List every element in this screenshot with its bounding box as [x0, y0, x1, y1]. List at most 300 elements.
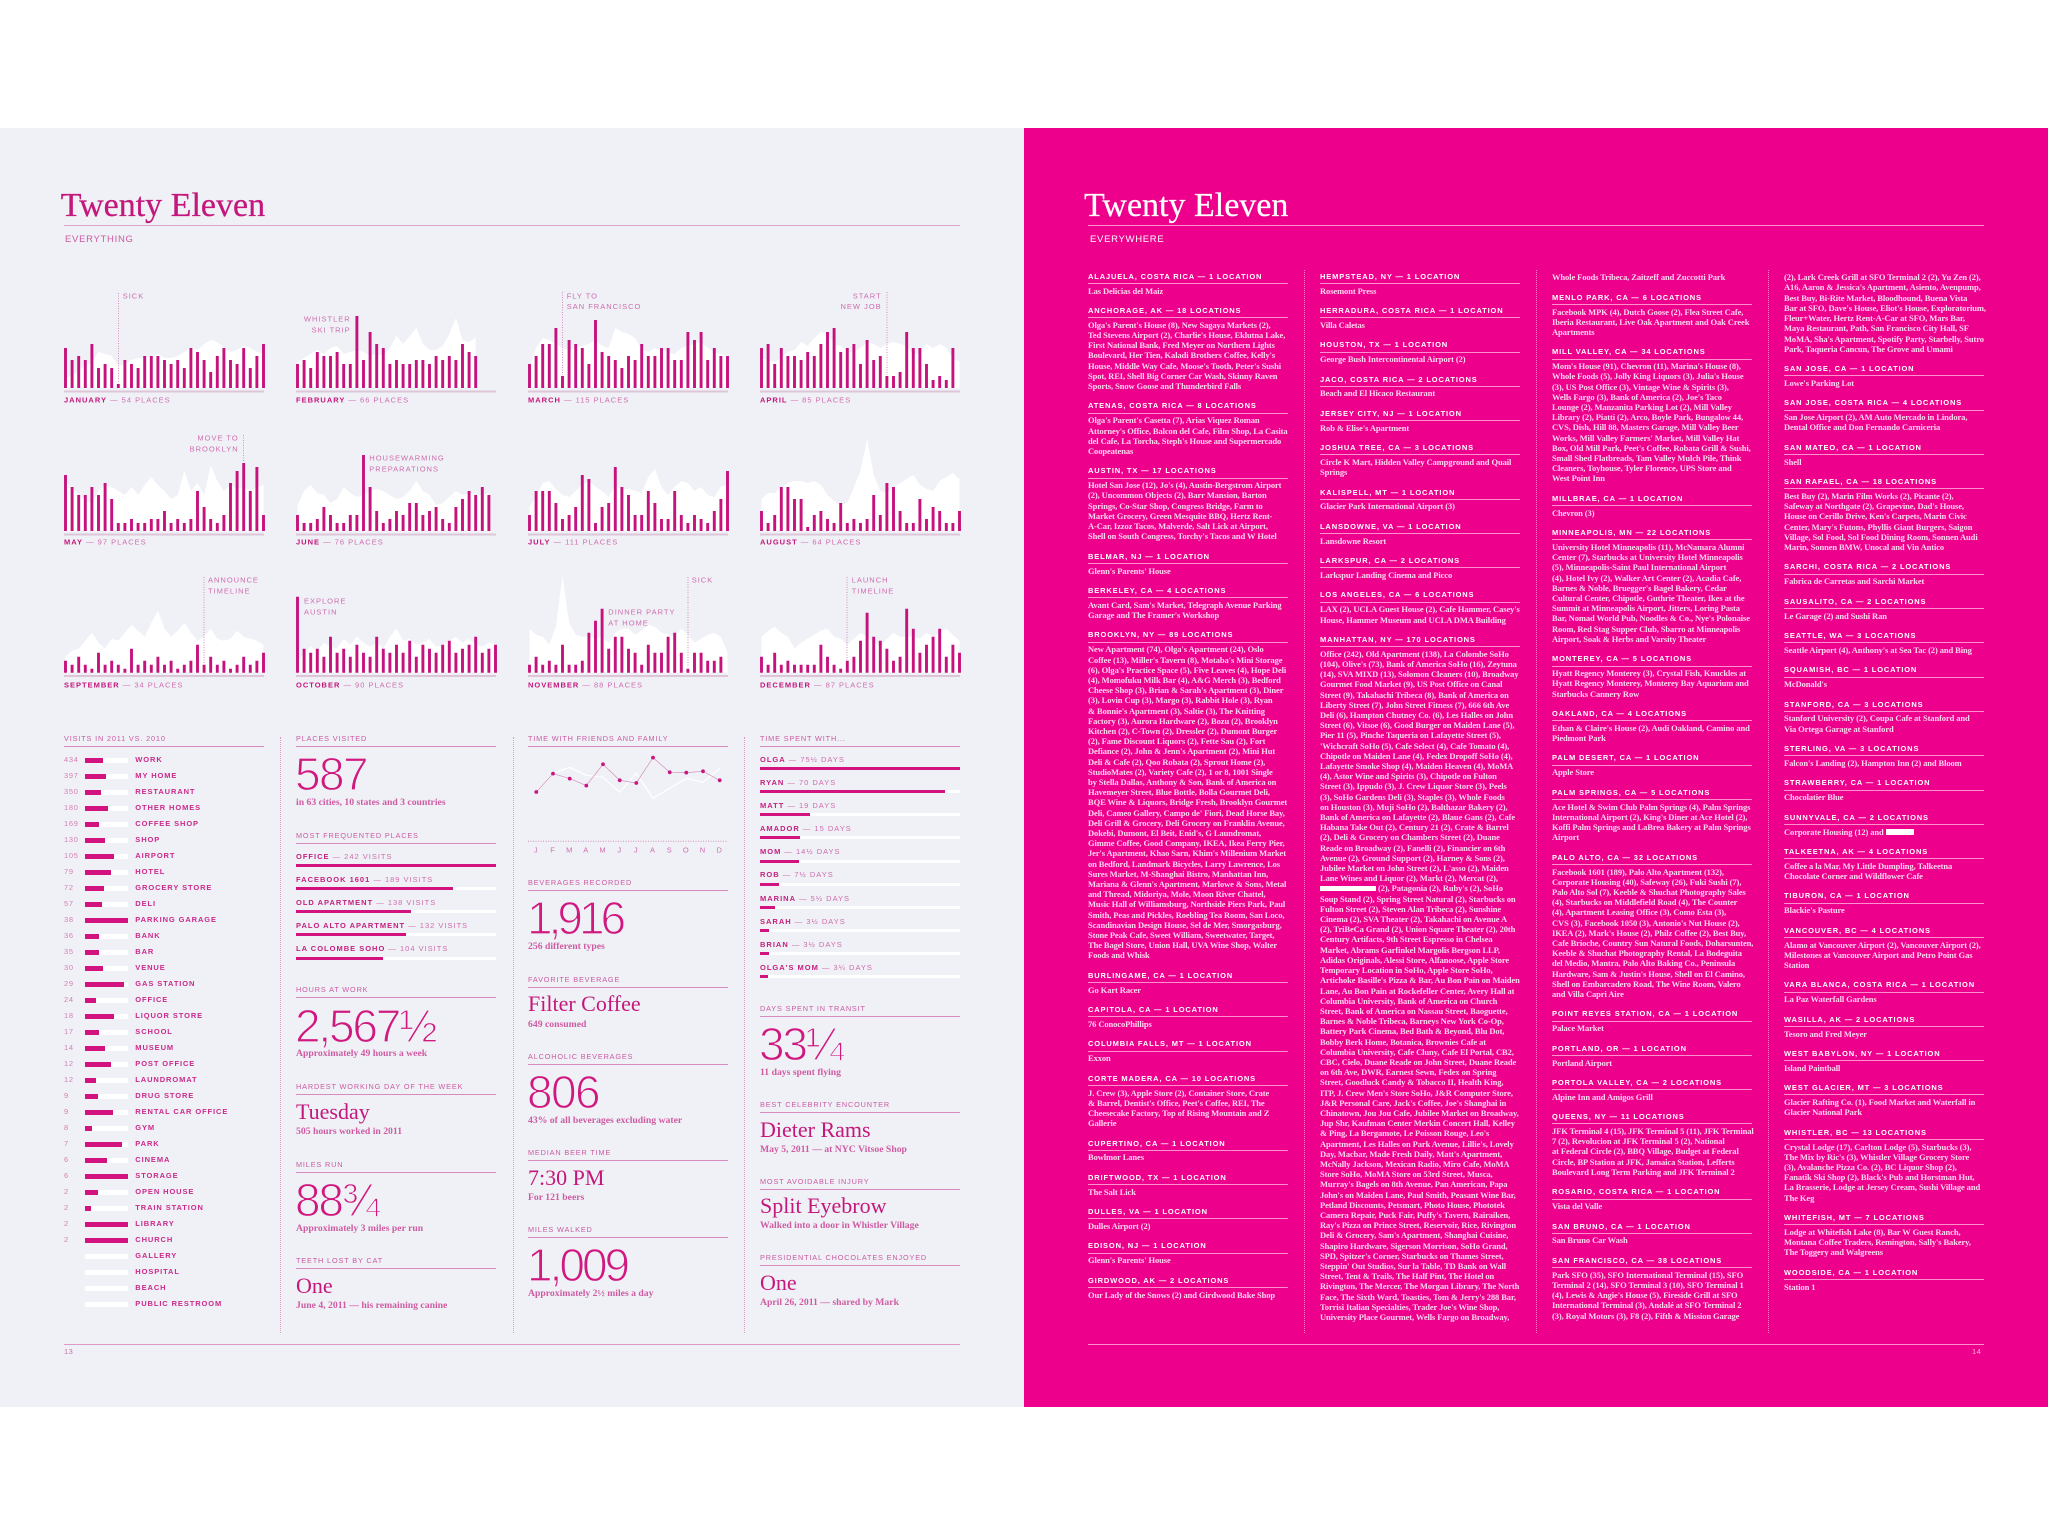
- location: Vancouver: [1784, 925, 1984, 970]
- row: liquor store: 18: [64, 1011, 74, 1020]
- chart: September: [64, 576, 264, 689]
- location: Berkeley: BERKELEY, CA — 4 LOCATIONS: [1088, 586, 1226, 595]
- location: Herradura: [1320, 305, 1520, 330]
- location: San Rafael: Village, Sol Food, Sol Food Dining Room, Sonnen Audi: [1784, 532, 1978, 542]
- location: Joshua Tree: Springs: [1320, 467, 1347, 477]
- chart: August: [760, 439, 960, 547]
- location: Menlo Park: MENLO PARK, CA — 6 LOCATIONS: [1552, 293, 1702, 302]
- location: San Rafael: SAN RAFAEL, CA — 18 LOCATIONS: [1784, 477, 1937, 486]
- row: restaurant: 350: [64, 787, 79, 796]
- location: Manhattan: Adidas Originals, Alessi Store, Alfanoose, Apple Store: [1320, 955, 1509, 965]
- row: airport: [64, 851, 175, 860]
- row: deli: 57: [64, 899, 74, 908]
- location: Manhattan: Soup Stand (2), Spring Street Natural (2), Starbucks on: [1320, 894, 1516, 904]
- location: Sausalito: [1784, 596, 1984, 621]
- row: bank: 36: [64, 931, 74, 940]
- line chart: time with friends and family: M: [599, 845, 607, 854]
- location: Manhattan: Pier 11 (5), Pinche Taqueria on Lafayette Street (5),: [1320, 730, 1501, 740]
- row: open house: 2: [64, 1187, 69, 1196]
- location: Millbrae: [1552, 493, 1752, 518]
- chart: January: JANUARY — 54 PLACES: [64, 396, 171, 405]
- location: Brooklyn: Foods and Whisk: [1088, 950, 1150, 960]
- location: Austin: Market Grocery, Green Mesquite BBQ, Hertz Rent-: [1088, 511, 1272, 521]
- location: Vancouver: Alamo at Vancouver Airport (2), Vancouver Airport (2),: [1784, 940, 1981, 950]
- location: Brooklyn: Factory (3), Aurora Hardware (2), Bozu (2), Brooklyn: [1088, 716, 1278, 726]
- item: office: OFFICE — 242 VISITS: [296, 852, 393, 861]
- list: time spent with: TIME SPENT WITH...: [760, 734, 846, 743]
- location: Cupertino: Bowlmor Lanes: [1088, 1152, 1144, 1162]
- location: Columbia Falls: COLUMBIA FALLS, MT — 1 LOCATION: [1088, 1039, 1252, 1048]
- row: rental car office: [64, 1107, 228, 1116]
- location: Queens: 7 (2), Revolucion at JFK Terminal 5 (2), National: [1552, 1136, 1725, 1146]
- location: Manhattan: Jubilee Market on John Street (2), L'asso (2), Maiden: [1320, 863, 1509, 873]
- stat: days spent in transit: DAYS SPENT IN TRANSIT: [760, 1004, 866, 1013]
- row: my home: 397: [64, 771, 79, 780]
- line chart: time with friends and family: J: [634, 845, 639, 854]
- location: Hempstead: [1320, 271, 1520, 296]
- location column 3: [1552, 271, 1752, 1330]
- location: Corte Madera: Gallerie: [1088, 1118, 1116, 1128]
- location: Manhattan: Torrisi Italian Specialties, Trader Joe's Wine Shop,: [1320, 1302, 1499, 1312]
- location: Manhattan: [1320, 634, 1520, 1322]
- location: Kalispell: [1320, 487, 1520, 512]
- location: Vara Blanca: [1784, 979, 1984, 1004]
- stat: presidential chocolates enjoyed: [760, 1253, 960, 1308]
- location: Atenas: del Cafe, La Torcha, Steph's House and Supermercado: [1088, 436, 1281, 446]
- location: Capitola: CAPITOLA, CA — 1 LOCATION: [1088, 1005, 1219, 1014]
- location: Brooklyn: StudioMates (2), Variety Cafe (2), 1 or 8, 1001 Single: [1088, 767, 1273, 777]
- item: rob: ROB — 7½ DAYS: [760, 870, 834, 879]
- location: West Glacier: [1784, 1082, 1984, 1117]
- location: Anchorage: Ted Stevens Airport (2), Charlie's House, Eklutna Lake,: [1088, 330, 1285, 340]
- location: Monterey: Hyatt Regency Monterey, Monterey Bay Aquarium and: [1552, 678, 1749, 688]
- row: other homes: [64, 803, 201, 812]
- stat: miles walked: [528, 1225, 728, 1301]
- item: facebook 1601: FACEBOOK 1601 — 189 VISITS: [296, 875, 433, 884]
- location: Minneapolis: Airport, Soak & Herbs and Varsity Theater: [1552, 634, 1706, 644]
- chart: May: BROOKLYN: [190, 444, 239, 453]
- location: San Francisco continued: Best Buy, Bi-Rite Market, Bloodhound, Buena Vista: [1784, 293, 1967, 303]
- location: Brooklyn: Deli, Cameo Gallery, Campo de' Fiori, Dead Horse Bay,: [1088, 808, 1285, 818]
- chart: May: MAY — 97 PLACES: [64, 538, 147, 547]
- location: Palm Desert: [1552, 752, 1752, 778]
- location: Jaco: JACO, COSTA RICA — 2 LOCATIONS: [1320, 375, 1478, 384]
- chart: March: FLY TO: [567, 291, 598, 300]
- stat: places visited: [295, 734, 496, 808]
- location: Minneapolis: Barnes & Noble, Bruegger's Bagel Bakery, Cedar: [1552, 583, 1727, 593]
- location: Brooklyn: Jer's Apartment, Khao Sarn, Khim's Millenium Market: [1088, 848, 1286, 858]
- location: Monterey: Hyatt Regency Monterey (3), Crystal Fish, Knuckles at: [1552, 668, 1746, 678]
- location: Dulles: DULLES, VA — 1 LOCATION: [1088, 1207, 1208, 1216]
- location: San Bruno: SAN BRUNO, CA — 1 LOCATION: [1552, 1222, 1691, 1231]
- item: ryan: RYAN — 70 DAYS: [760, 778, 836, 787]
- location: Whitefish: The Toggery and Walgreens: [1784, 1247, 1883, 1257]
- location: Queens: Circle, BP Station at JFK, Jamaica Station, Lefferts: [1552, 1157, 1735, 1167]
- location: Atenas: [1088, 400, 1288, 456]
- location: Larkspur: Larkspur Landing Cinema and Picco: [1320, 570, 1452, 580]
- location: Joshua Tree: [1320, 442, 1520, 477]
- location: Austin: Shell on South Congress, Torchy's Tacos and W Hotel: [1088, 531, 1277, 541]
- row: museum: [64, 1043, 174, 1052]
- row: shop: 130: [64, 835, 79, 844]
- row: parking garage: [64, 915, 217, 924]
- row: beach: BEACH: [135, 1283, 166, 1292]
- location: Manhattan: Habana Take Out (2), Century 21 (2), Crate & Barrel: [1320, 822, 1509, 832]
- stat: places visited: in 63 cities, 10 states and 3 countries: [296, 797, 446, 808]
- location: Palm Springs: Koffi Palm Springs and LaBrea Bakery at Palm Springs: [1552, 822, 1751, 832]
- location: Sterling: STERLING, VA — 3 LOCATIONS: [1784, 744, 1919, 753]
- stat: presidential chocolates enjoyed: One: [760, 1270, 797, 1295]
- page number 13: 13: [64, 1347, 73, 1356]
- chart: June: JUNE — 76 PLACES: [296, 538, 384, 547]
- row: deli: DELI: [135, 899, 156, 908]
- location: Queens: Boulevard Long Term Parking and JFK Terminal 2: [1552, 1167, 1735, 1177]
- location: Manhattan continued: Whole Foods Tribeca, Zaitzeff and Zuccotti Park: [1552, 272, 1725, 282]
- location: San Rafael: [1784, 476, 1984, 552]
- location: San Francisco continued: Fleur+Water, Hertz Rent-A-Car at SFO, Mars Bar,: [1784, 313, 1965, 323]
- row: liquor store: [64, 1011, 203, 1020]
- location: Whistler: Fanatik Ski Shop (2), Black's Pub and Horstman Hut,: [1784, 1172, 1974, 1182]
- row: my home: MY HOME: [135, 771, 177, 780]
- row: deli: [64, 899, 156, 908]
- row: school: 17: [64, 1027, 74, 1036]
- location: Whitefish: Lodge at Whitefish Lake (8), Bar W Guest Ranch,: [1784, 1227, 1960, 1237]
- location: Squamish: McDonald's: [1784, 679, 1827, 689]
- location: Oakland: Ethan & Claire's House (2), Audi Oakland, Camino and: [1552, 723, 1750, 733]
- item: olga: [760, 755, 960, 778]
- location: Joshua Tree: Circle K Mart, Hidden Valley Campground and Quail: [1320, 457, 1511, 467]
- line chart: time with friends and family: S: [667, 845, 673, 854]
- location: Hempstead: Rosemont Press: [1320, 286, 1376, 296]
- row: restaurant: RESTAURANT: [135, 787, 195, 796]
- location: Manhattan: Face, The Sixth Ward, Toasties, Tom & Jerry's 288 Bar,: [1320, 1292, 1516, 1302]
- location: Whistler: Crystal Lodge (17), Carlton Lodge (5), Starbucks (3),: [1784, 1142, 1971, 1152]
- row: drug store: DRUG STORE: [135, 1091, 194, 1100]
- location: San Bruno: San Bruno Car Wash: [1552, 1235, 1628, 1245]
- location: Vancouver: Milestones at Vancouver Airport and Petro Point Gas: [1784, 950, 1972, 960]
- location: Lansdowne: Lansdowne Resort: [1320, 536, 1386, 546]
- location: Manhattan: CBC, Cielo, Duane Reade on John Street, Duane Reade: [1320, 1057, 1516, 1067]
- row: church: CHURCH: [135, 1235, 173, 1244]
- row: storage: [64, 1171, 179, 1180]
- location: San Rafael: Marin, Sonnen BMW, Unocal and Vin Antico: [1784, 542, 1944, 552]
- location: Manhattan: (4), Astor Wine and Spirits (3), Chipotle on Fulton: [1320, 771, 1497, 781]
- stat: days spent in transit: [760, 1004, 960, 1080]
- location: Girdwood: GIRDWOOD, AK — 2 LOCATIONS: [1088, 1276, 1229, 1285]
- location: Brooklyn: Sures Market, M-Shanghai Bistro, Manhattan Inn,: [1088, 869, 1268, 879]
- location: Manhattan: Reade on Broadway (2), Fanelli (2), Financier on 6th: [1320, 843, 1505, 853]
- location: Manhattan: Avenue (2), Ground Support (2), Harney & Sons (2),: [1320, 853, 1505, 863]
- location: Dulles: [1088, 1206, 1288, 1231]
- location: Manhattan: Street (9), Takahachi Tribeca (8), Bank of America on: [1320, 690, 1509, 700]
- location: Sterling: [1784, 743, 1984, 768]
- chart: March: MARCH — 115 PLACES: [528, 396, 629, 405]
- row: park: [64, 1139, 160, 1148]
- row: storage: 6: [64, 1171, 69, 1180]
- location: Brooklyn: Havemeyer Street, Blue Bottle, Bolla Gourmet Deli,: [1088, 787, 1270, 797]
- row: public restroom: [85, 1299, 222, 1308]
- row: airport: AIRPORT: [135, 851, 175, 860]
- location: Atenas: Coopeatenas: [1088, 446, 1133, 456]
- location: San Bruno: [1552, 1221, 1752, 1246]
- row: liquor store: LIQUOR STORE: [135, 1011, 203, 1020]
- item: old apartment: OLD APARTMENT — 138 VISITS: [296, 898, 436, 907]
- chart: May: [64, 433, 264, 547]
- location: Girdwood: Our Lady of the Snows (2) and Girdwood Bake Shop: [1088, 1290, 1275, 1300]
- location: Burlingame: BURLINGAME, CA — 1 LOCATION: [1088, 971, 1233, 980]
- location: Manhattan: Columbia University, Bank of America on Church: [1320, 996, 1497, 1006]
- row: library: 2: [64, 1219, 69, 1228]
- location: Manhattan: Apartment, Les Halles on Park Avenue, Lillie's, Lovely: [1320, 1139, 1514, 1149]
- stat: best celebrity encounter: May 5, 2011 — at NYC Vitsoe Shop: [760, 1144, 907, 1155]
- location: Manhattan: (3), SoHo Gardens Deli (3), Staples (3), Whole Foods: [1320, 792, 1505, 802]
- location: Strawberry: STRAWBERRY, CA — 1 LOCATION: [1784, 778, 1930, 787]
- location column 1: [1088, 271, 1288, 1309]
- list: most frequented places: [296, 831, 496, 960]
- location: Alajuela: ALAJUELA, COSTA RICA — 1 LOCATION: [1088, 272, 1262, 281]
- location: Kalispell: Glacier Park International Airport (3): [1320, 501, 1455, 511]
- row: bank: BANK: [135, 931, 161, 940]
- stat: hardest working day: [296, 1082, 496, 1137]
- row: gas station: 29: [64, 979, 74, 988]
- row: drug store: [64, 1091, 194, 1100]
- location: Brooklyn: The Bagel Store, Union Hall, UVA Wine Shop, Walter: [1088, 940, 1277, 950]
- row: church: [64, 1235, 173, 1244]
- stat: hours at work: HOURS AT WORK: [296, 985, 368, 994]
- location: Manhattan: Day, Macbar, Made Fresh Daily, Matt's Apartment,: [1320, 1149, 1502, 1159]
- location: Palm Desert: PALM DESERT, CA — 1 LOCATION: [1552, 753, 1699, 762]
- row: my home: [64, 771, 177, 780]
- line chart: time with friends and family: A: [650, 845, 656, 854]
- item: ryan: [760, 778, 960, 801]
- item: brian: BRIAN — 3½ DAYS: [760, 940, 843, 949]
- location: Joshua Tree: JOSHUA TREE, CA — 3 LOCATIONS: [1320, 443, 1474, 452]
- stat: favorite beverage: [528, 975, 728, 1030]
- location: Vara Blanca: VARA BLANCA, COSTA RICA — 1 LOCATION: [1784, 980, 1975, 989]
- location: Anchorage: Spot, REI, Shell Big Corner Car Wash, Skinny Raven: [1088, 371, 1277, 381]
- location: Corte Madera: J. Crew (3), Apple Store (2), Container Store, Crate: [1088, 1088, 1269, 1098]
- location: Los Angeles: House, Hammer Museum and UCLA DMA Building: [1320, 615, 1506, 625]
- list: most frequented places: MOST FREQUENTED PLACES: [296, 831, 419, 840]
- location: Manhattan: Street, Goodluck Candy & Tobacco II, Health King,: [1320, 1077, 1503, 1087]
- location: Mill Valley: Works, Mill Valley Farmers' Market, Mill Valley Hat: [1552, 433, 1739, 443]
- stat: median beer time: [528, 1148, 728, 1203]
- location: Anchorage: Sports, Snow Goose and Thunderbird Falls: [1088, 381, 1241, 391]
- location: Lansdowne: LANSDOWNE, VA — 1 LOCATION: [1320, 522, 1462, 531]
- location: Monterey: [1552, 653, 1752, 699]
- item: olga: OLGA — 75½ DAYS: [760, 755, 845, 764]
- row: beach: [85, 1283, 166, 1292]
- location: Brooklyn: Stone Peak Cafe, Sweet William, Sweetwater, Target,: [1088, 930, 1274, 940]
- stat: teeth lost by cat: One: [296, 1273, 333, 1298]
- row: train station: TRAIN STATION: [135, 1203, 204, 1212]
- stat: alcoholic beverages: ALCOHOLIC BEVERAGES: [528, 1052, 633, 1061]
- row: cinema: CINEMA: [135, 1155, 170, 1164]
- location: Queens: JFK Terminal 4 (15), JFK Terminal 5 (11), JFK Terminal: [1552, 1126, 1754, 1136]
- location: Corte Madera: [1088, 1073, 1288, 1128]
- location: Anchorage: Olga's Parent's House (8), New Sagaya Markets (2),: [1088, 320, 1271, 330]
- row: museum: 14: [64, 1043, 74, 1052]
- row: laundromat: [64, 1075, 197, 1084]
- location: Austin: AUSTIN, TX — 17 LOCATIONS: [1088, 466, 1217, 475]
- location: Millbrae: Chevron (3): [1552, 508, 1594, 518]
- stat: miles walked: 1,009: [527, 1239, 627, 1291]
- location: Manhattan: McNally Jackson, Mexican Radio, Miro Cafe, MoMA: [1320, 1159, 1509, 1169]
- location: Brooklyn: [1088, 629, 1288, 961]
- chart: February: SKI TRIP: [312, 326, 351, 335]
- row: post office: POST OFFICE: [135, 1059, 195, 1068]
- location: Vancouver: Station: [1784, 960, 1809, 970]
- location: Columbia Falls: [1088, 1038, 1288, 1063]
- location: Whistler: La Brasserie, Lodge at Jersey Cream, Sushi Village and: [1784, 1182, 1980, 1192]
- location: Jaco: [1320, 374, 1520, 399]
- chart: September: TIMELINE: [208, 586, 251, 595]
- location: Queens: QUEENS, NY — 11 LOCATIONS: [1552, 1112, 1685, 1121]
- location: Sarchi: SARCHI, COSTA RICA — 2 LOCATIONS: [1784, 562, 1951, 571]
- row: parking garage: 38: [64, 915, 74, 924]
- location: Whistler: The Mix by Ric's (3), Whistler Village Grocery Store: [1784, 1152, 1969, 1162]
- chart: November: DINNER PARTY: [608, 608, 675, 617]
- row: library: LIBRARY: [135, 1219, 175, 1228]
- stat: most avoidable injury: Walked into a door in Whistler Village: [760, 1220, 919, 1231]
- row: library: [64, 1219, 175, 1228]
- stat: alcoholic beverages: [528, 1052, 728, 1128]
- location: Talkeetna: Coffee a la Mar, My Little Dumpling, Talkeetna: [1784, 861, 1952, 871]
- location: Manhattan: Bank of America on Lafayette (2), Blaue Gans (2), Cafe: [1320, 812, 1515, 822]
- list: time spent with: [760, 734, 960, 979]
- location: Stanford: [1784, 699, 1984, 734]
- location: Woodside: WOODSIDE, CA — 1 LOCATION: [1784, 1268, 1918, 1277]
- location: Sausalito: Le Garage (2) and Sushi Ran: [1784, 611, 1887, 621]
- row: office: 24: [64, 995, 74, 1004]
- location: Mill Valley: West Point Inn: [1552, 473, 1605, 483]
- location: San Francisco: (4), Lewis & Angie's House (5), Fireside Grill at SFO: [1552, 1290, 1738, 1300]
- location: Mill Valley: MILL VALLEY, CA — 34 LOCATIONS: [1552, 347, 1706, 356]
- location: Manhattan: Rivington, The Mercer, The Morgan Library, The North: [1320, 1281, 1519, 1291]
- stat: teeth lost by cat: TEETH LOST BY CAT: [296, 1256, 383, 1265]
- location: Corte Madera: Cheesecake Factory, Top of Rising Mountain and Z: [1088, 1108, 1269, 1118]
- location: San Rafael: House on Cerillo Drive, Ken's Carpets, Marin Civic: [1784, 511, 1967, 521]
- location: Dulles: Dulles Airport (2): [1088, 1221, 1150, 1231]
- location: Alajuela: [1088, 271, 1288, 296]
- location: Palo Alto: IKEA (2), Mark's House (2), Philz Coffee (2), Best Buy,: [1552, 928, 1746, 938]
- location: Minneapolis: Bar, Nomad World Pub, Noodles & Co., Nye's Polonaise: [1552, 613, 1750, 623]
- location: Palo Alto: Hardware, Sam & Justin's House, Shell on El Camino,: [1552, 969, 1745, 979]
- row: gym: GYM: [135, 1123, 155, 1132]
- location: San Mateo: Shell: [1784, 457, 1801, 467]
- location: San Jose Costa Rica: San Jose Airport (2), AM Auto Mercado in Lindora,: [1784, 412, 1967, 422]
- location: Brooklyn: (2), Fame Discount Liquors (2), Fette Sau (2), Fort: [1088, 736, 1265, 746]
- chart: June: [296, 453, 496, 547]
- location: Manhattan: Street, Tent & Trails, The Half Pint, The Hotel on: [1320, 1271, 1494, 1281]
- location: Rosario: ROSARIO, COSTA RICA — 1 LOCATION: [1552, 1187, 1720, 1196]
- location: Brooklyn: (4), Momofuku Milk Bar (4), A&G Merch (3), Bedford: [1088, 675, 1281, 685]
- location: Driftwood: [1088, 1172, 1288, 1197]
- location: West Glacier: Glacier National Park: [1784, 1107, 1862, 1117]
- location: Mill Valley: CVS, Dish, Hill 88, Masters Garage, Mill Valley Beer: [1552, 422, 1739, 432]
- location: Squamish: [1784, 664, 1984, 689]
- location: Anchorage: Boulevard, Her Tien, Kaladi Brothers Coffee, Kelly's: [1088, 350, 1275, 360]
- chart: January: [64, 292, 264, 405]
- location: Manhattan: Market, Abrams Garfinkel Margolis Bergson LLP,: [1320, 945, 1500, 955]
- row: coffee shop: [64, 819, 199, 828]
- location: Palm Springs: Airport: [1552, 832, 1579, 842]
- row: park: 7: [64, 1139, 69, 1148]
- item: matt: MATT — 19 DAYS: [760, 801, 836, 810]
- location column 4: [1784, 271, 1984, 1301]
- location: Larkspur: LARKSPUR, CA — 2 LOCATIONS: [1320, 556, 1460, 565]
- location: Manhattan: Gourmet Food Market (9), US Post Office on Canal: [1320, 679, 1502, 689]
- row: venue: [64, 963, 166, 972]
- location: Minneapolis: University Hotel Minneapolis (11), McNamara Alumni: [1552, 542, 1744, 552]
- location: Manhattan: Battery Park Cinema, Bed Bath & Beyond, Blu Dot,: [1320, 1026, 1504, 1036]
- location: Queens: at Federal Circle (2), BBQ Village, Budget at Federal: [1552, 1146, 1739, 1156]
- location: Jersey City: JERSEY CITY, NJ — 1 LOCATION: [1320, 409, 1462, 418]
- chart: October: [296, 597, 496, 689]
- chart: November: SICK: [692, 576, 713, 585]
- location: Manhattan: Temporary Location in SoHo, Apple Store SoHo,: [1320, 965, 1493, 975]
- location: Brooklyn: Kitchen (2), C-Town (2), Dressler (2), Dumont Burger: [1088, 726, 1277, 736]
- row: bar: BAR: [135, 947, 154, 956]
- location: Rosario: [1552, 1186, 1752, 1211]
- chart: May: MOVE TO: [197, 433, 239, 442]
- location: San Francisco continued: Maya Restaurant, Path, San Francisco City Hall, SF: [1784, 323, 1969, 333]
- row: school: SCHOOL: [135, 1027, 173, 1036]
- line chart: time with friends and family: F: [550, 845, 556, 854]
- chart: September: ANNOUNCE: [208, 576, 259, 585]
- location: Atenas: Attorney's Office, Balcon del Cafe, Film Shop, La Casita: [1088, 426, 1288, 436]
- location column 2: [1320, 271, 1520, 1331]
- location: San Francisco continued: MoMA, Sha's Apartment, Spotify Party, Starbelly, Sutro: [1784, 334, 1984, 344]
- location: San Rafael: Center, Mary's Futons, Phyllis Giant Burgers, Saigon: [1784, 522, 1972, 532]
- row: train station: [64, 1203, 204, 1212]
- location: San Jose Costa Rica: [1784, 397, 1984, 433]
- location: Palo Alto: Palo Alto Sol (7), Keeble & Shuchat Photography Sales: [1552, 887, 1746, 897]
- chart: August: AUGUST — 64 PLACES: [760, 538, 861, 547]
- chart: July: JULY — 111 PLACES: [528, 538, 618, 547]
- location: Monterey: Starbucks Cannery Row: [1552, 689, 1639, 699]
- location: Palo Alto: Facebook 1601 (189), Palo Alto Apartment (132),: [1552, 866, 1724, 876]
- location: Manhattan: (104), Olive's (73), Bank of America SoHo (16), Zeytuna: [1320, 659, 1517, 669]
- chart: February: [296, 315, 496, 405]
- row: laundromat: 12: [64, 1075, 74, 1084]
- location: Point Reyes Station: Palace Market: [1552, 1023, 1604, 1033]
- location: Capitola: [1088, 1004, 1288, 1029]
- location: Seattle: Seattle Airport (4), Anthony's at Sea Tac (2) and Bing: [1784, 645, 1972, 655]
- location: Brooklyn: Deli & Cafe (2), Qoo Robata (2), Sprout Home (2),: [1088, 757, 1265, 767]
- row: shop: SHOP: [135, 835, 160, 844]
- location: Portola Valley: PORTOLA VALLEY, CA — 2 LOCATIONS: [1552, 1078, 1722, 1087]
- chart: January: SICK: [123, 292, 144, 301]
- location: Belmar: [1088, 551, 1288, 576]
- chart: June: HOUSEWARMING: [369, 453, 445, 462]
- location: Oakland: Piedmont Park: [1552, 733, 1606, 743]
- title: Twenty Eleven: Twenty Eleven: [61, 186, 265, 224]
- stat: hardest working day: Tuesday: [296, 1099, 370, 1124]
- row: bar: 35: [64, 947, 74, 956]
- row: gym: [64, 1123, 155, 1132]
- row: post office: 12: [64, 1059, 74, 1068]
- location: Brooklyn: New Apartment (74), Olga's Apartment (24), Oslo: [1088, 644, 1264, 654]
- location: Talkeetna: [1784, 846, 1984, 881]
- row: bar: [64, 947, 154, 956]
- location: Manhattan: on 6th Ave, DWR, Earnest Sewn, Fedex on Spring: [1320, 1067, 1496, 1077]
- page number 14: 14: [1972, 1347, 1981, 1356]
- location: Edison: Glenn's Parents' House: [1088, 1255, 1171, 1265]
- location: Driftwood: The Salt Lick: [1088, 1187, 1136, 1197]
- location: West Babylon: Island Paintball: [1784, 1063, 1840, 1073]
- location: Girdwood: [1088, 1275, 1288, 1300]
